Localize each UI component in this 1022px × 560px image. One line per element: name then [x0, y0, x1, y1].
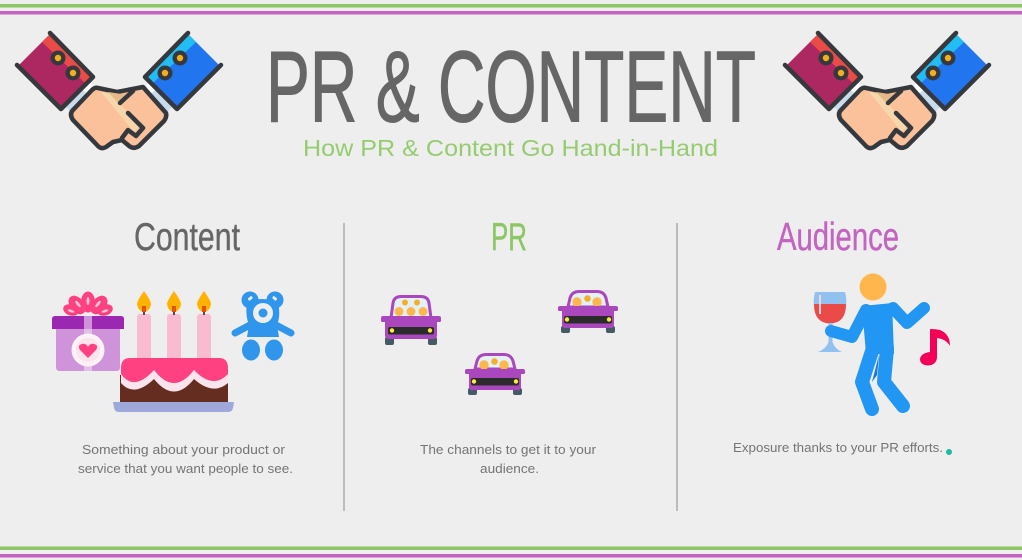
text: audience description: Exposure thanks to your PR efforts. — [733, 441, 943, 455]
heading: audience: Audience — [777, 216, 899, 259]
panel: content — [52, 216, 293, 476]
icon: gift box — [52, 292, 124, 371]
icon: music note — [920, 329, 950, 366]
divider right — [676, 223, 678, 511]
divider left — [343, 223, 345, 511]
icon: car two — [558, 292, 618, 333]
icon: teddy bear — [235, 292, 291, 360]
heading: content: Content — [134, 216, 240, 259]
icon: car one — [381, 296, 441, 345]
panel: audience — [733, 216, 952, 455]
text: content description: Something about your product or — [82, 443, 285, 457]
subtitle: How PR & Content Go Hand-in-Hand — [303, 135, 718, 161]
icon: handshake left — [17, 33, 221, 148]
icon: car three — [465, 354, 525, 395]
title: PR & CONTENT — [266, 32, 756, 144]
text: PR description: The channels to get it to your — [420, 443, 596, 457]
text: PR description: audience. — [480, 462, 539, 476]
text: content description: service that you want people to see. — [78, 462, 293, 476]
icon: handshake right — [785, 33, 989, 148]
text: PR description — [420, 443, 596, 476]
marker dot — [946, 449, 952, 455]
panel: PR — [381, 216, 618, 476]
icon: dancing person — [831, 274, 924, 409]
icon: wine glass — [814, 292, 846, 352]
text: content description — [78, 443, 293, 476]
heading: PR: PR — [491, 216, 527, 259]
icon: birthday cake — [113, 291, 234, 412]
